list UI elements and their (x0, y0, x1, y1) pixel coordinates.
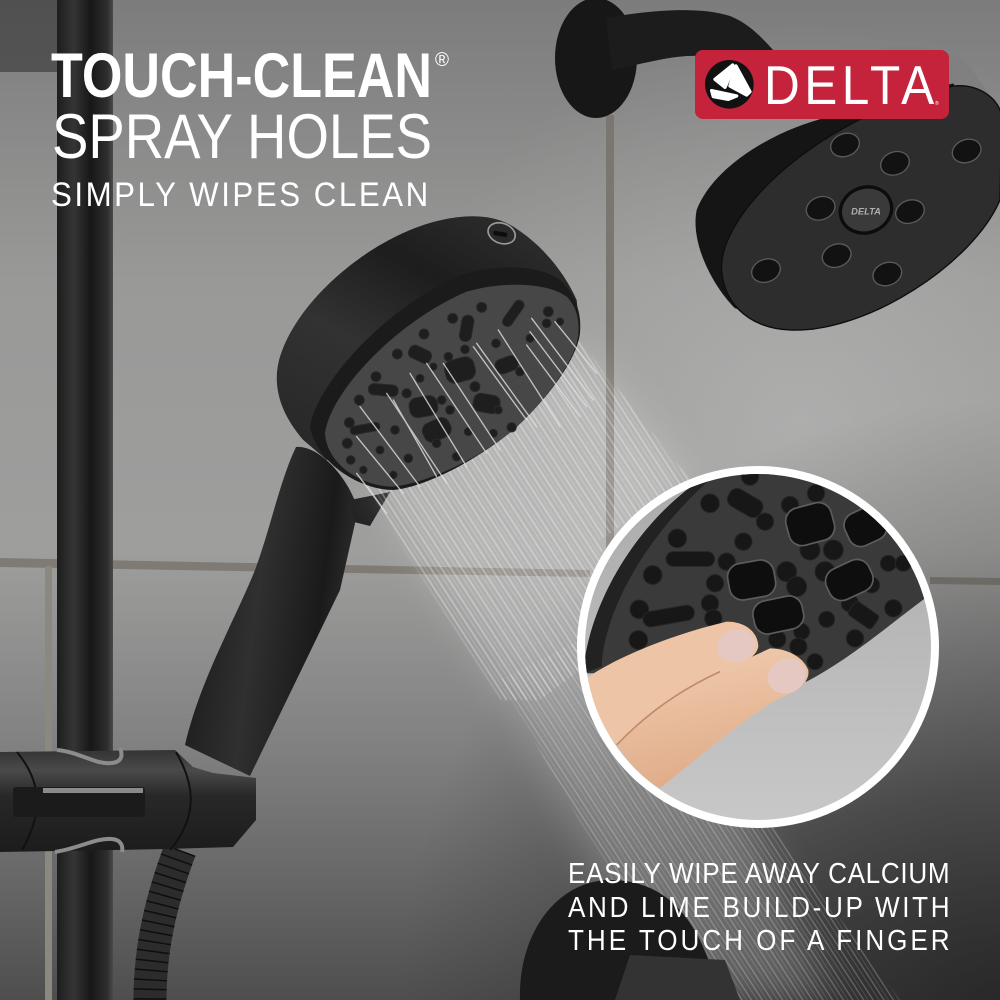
hand shower handle (185, 447, 390, 776)
water spray (360, 335, 900, 1000)
caption (568, 857, 950, 956)
fixed shower arm and flange (555, 0, 775, 118)
lower spray streaks (500, 620, 900, 1000)
fingernails (717, 630, 755, 662)
title: ® (435, 50, 449, 71)
spray mist (370, 340, 830, 1000)
upper spray streaks (360, 335, 690, 700)
centre Delta medallion: DELTA (851, 207, 881, 217)
spray nozzles (342, 298, 564, 479)
fixed round shower head (696, 46, 1000, 330)
locking lever (13, 787, 145, 817)
wall-mounted slide bar (0, 0, 113, 1000)
title: SPRAY HOLES (52, 102, 432, 172)
icon: Delta triangle mark (705, 60, 754, 109)
title: SIMPLY WIPES CLEAN (51, 175, 428, 213)
title: TOUCH-CLEAN (51, 41, 432, 111)
inset spray head face (585, 474, 924, 682)
Delta logo badge (695, 50, 949, 119)
nozzles (748, 129, 984, 290)
water jets leaving the face (357, 318, 597, 513)
caption: EASILY WIPE AWAY CALCIUM (568, 857, 950, 889)
centre Delta medallion (834, 180, 898, 240)
tub valve trim (520, 880, 740, 1000)
clamp body (0, 750, 256, 852)
caption: AND LIME BUILD-UP WITH (568, 891, 950, 923)
Delta logo badge: ® (935, 100, 939, 107)
slider bracket and hose (0, 748, 256, 1000)
inset fingers (580, 622, 812, 788)
mode switch tab (350, 492, 390, 526)
hand shower head (277, 216, 597, 513)
inset circle: finger wiping spray holes (577, 466, 939, 828)
title (51, 41, 449, 213)
Delta logo badge: DELTA (764, 56, 934, 117)
mode button (485, 219, 518, 248)
large oval openings (725, 500, 891, 636)
pole clips (57, 748, 121, 763)
caption: THE TOUCH OF A FINGER (568, 924, 950, 956)
flexible hose (150, 850, 180, 1000)
